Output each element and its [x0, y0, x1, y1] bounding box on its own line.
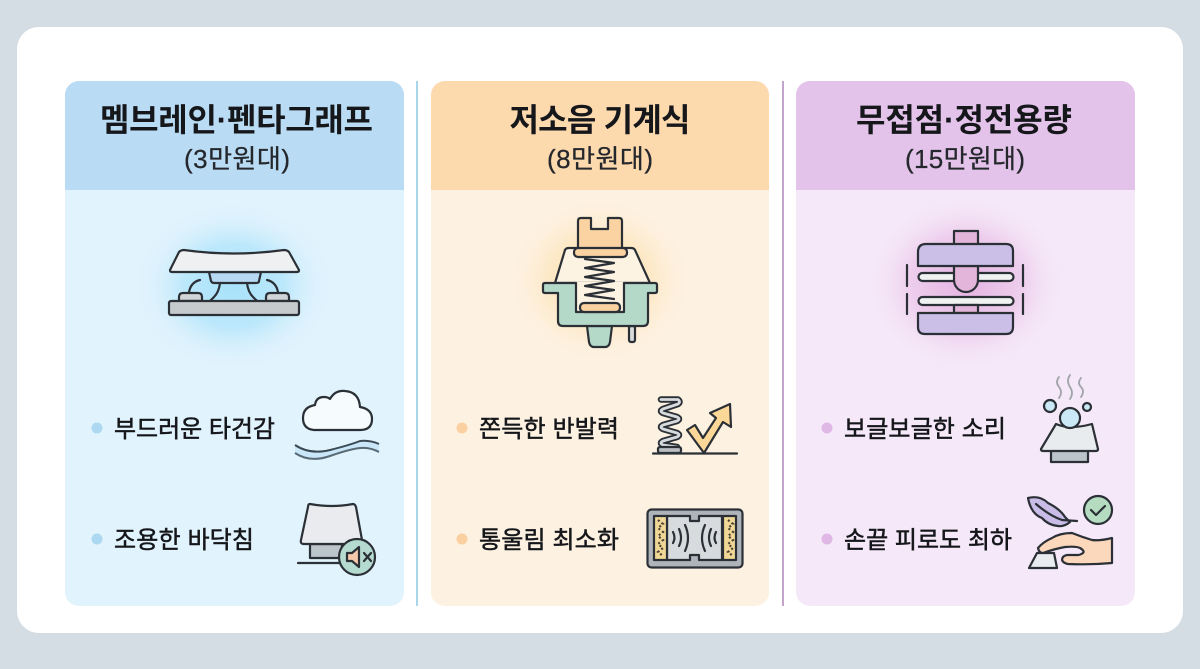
heading: silent: 저소음 기계식 — [510, 102, 690, 138]
heading: membrane: 멤브레인·펜타그래프 — [100, 102, 373, 138]
heading: membrane: (3만원대) — [184, 144, 290, 174]
item: quiet bottom-out: 조용한 바닥침 — [114, 527, 254, 554]
icon: spring with arrow — [653, 400, 737, 454]
heading: capacitive: 무접점·정전용량 — [856, 102, 1072, 138]
divider — [416, 81, 418, 606]
panel: contactless capacitive — [796, 81, 1135, 606]
icon: muted key — [298, 504, 375, 575]
heading: capacitive: (15만원대) — [905, 144, 1025, 174]
icon: cloud and wind — [295, 391, 379, 459]
item: minimize hollow ring: 통울림 최소화 — [479, 527, 619, 554]
heading: membrane — [100, 102, 373, 174]
item: chewy rebound: 쫀득한 반발력 — [479, 416, 619, 443]
icon: capacitive switch — [866, 195, 1066, 371]
icon: feather, check and hand — [1028, 496, 1112, 568]
panel: silent mechanical — [431, 81, 769, 606]
item: soft typing feel: 부드러운 타건감 — [114, 416, 275, 443]
icon: mechanical switch — [505, 195, 695, 365]
heading: capacitive — [856, 102, 1072, 174]
icon: bubbling key — [1041, 375, 1098, 462]
heading: silent: (8만원대) — [547, 144, 653, 174]
item: low fingertip fatigue: 손끝 피로도 최하 — [844, 527, 1012, 554]
icon: dampened case — [648, 510, 742, 568]
panel: membrane pantograph — [65, 81, 404, 606]
divider — [782, 81, 784, 606]
item: bubbly sound: 보글보글한 소리 — [844, 416, 1006, 443]
icon: pantograph key — [134, 202, 334, 370]
heading: silent — [510, 102, 690, 174]
